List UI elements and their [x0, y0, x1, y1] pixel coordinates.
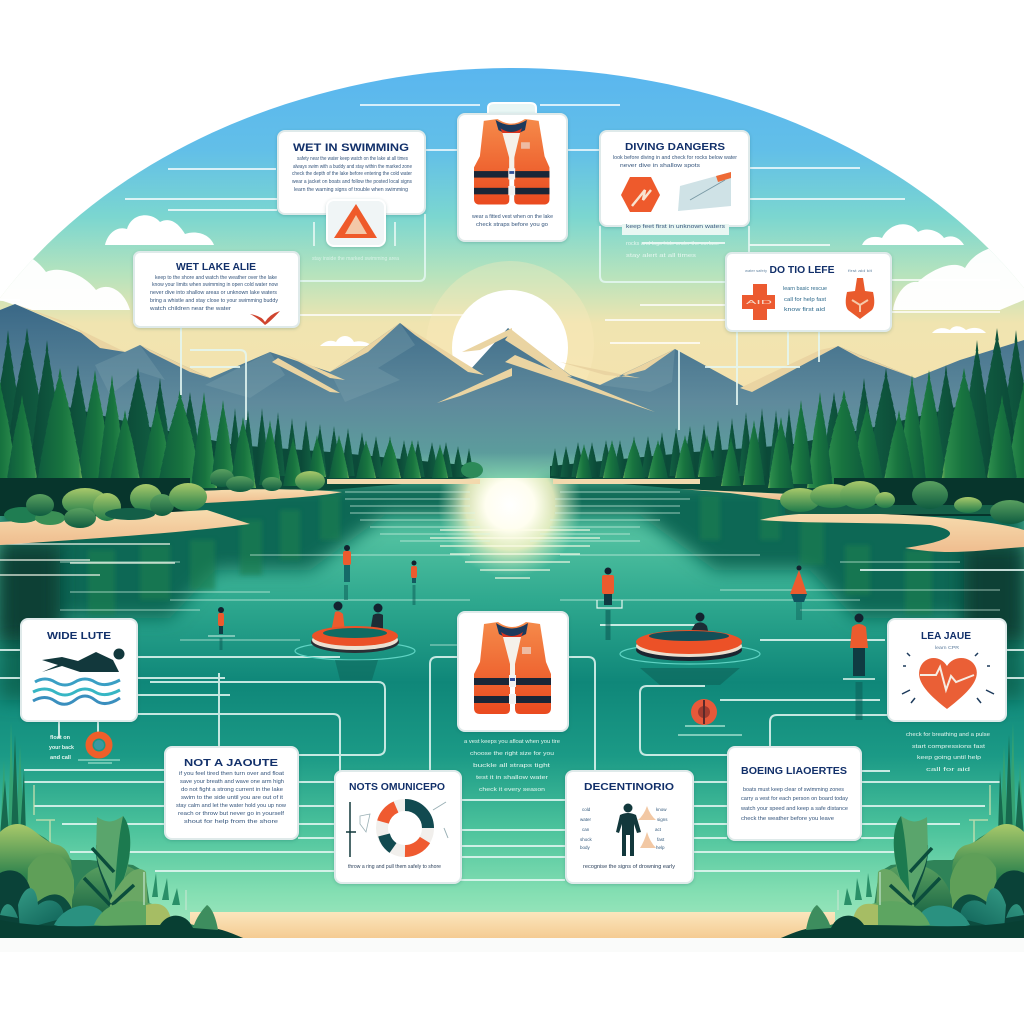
left forest	[0, 328, 474, 516]
side labels: water	[580, 817, 592, 822]
side labels: help	[656, 845, 665, 850]
caption	[472, 214, 553, 228]
body text: safety near the water keep watch on the lake at all times	[297, 156, 408, 162]
panel: do the left: first aid kit	[848, 268, 873, 273]
side labels	[580, 807, 668, 850]
heading: WIDE LUTE	[47, 631, 111, 642]
body text: always swim with a buddy and stay within the marked zone	[293, 164, 412, 170]
icon: life vest	[474, 622, 551, 714]
lake scene background	[0, 60, 1024, 490]
body text: check the depth of the lake before entering the cold water	[292, 171, 412, 177]
pale caption: stay alert at all times	[626, 253, 697, 259]
body text: watch your speed and keep a safe distance	[741, 806, 848, 812]
icon: cones	[638, 806, 656, 848]
right shore	[553, 479, 1024, 552]
panel: lea jaue	[888, 619, 1006, 721]
caption: heart: check for breathing and a pulse	[906, 732, 990, 738]
person 1	[343, 545, 351, 600]
heading: BOEING LIAOERTES	[741, 766, 847, 777]
side labels: cold	[582, 807, 591, 812]
heading: LEA JAUE	[921, 631, 971, 642]
body text	[741, 787, 849, 822]
bottom sand	[190, 912, 835, 940]
person 4	[790, 566, 807, 620]
body text	[150, 275, 279, 312]
caption: left ring: float on	[50, 735, 70, 741]
sun reflection	[440, 478, 580, 575]
body text: wear a jacket on boats and follow the posted local signs	[292, 179, 412, 185]
side labels: fast	[657, 837, 665, 842]
person 6	[843, 614, 875, 720]
water streaks	[60, 492, 1000, 645]
body text: bring a whistle and stay close to your swimming buddy	[150, 298, 279, 304]
body text: know first aid	[784, 307, 825, 313]
caption: vest: test it in shallow water	[476, 775, 548, 781]
pale caption: rocks and logs hide under the surface	[626, 241, 719, 247]
panel: diving dangers	[600, 131, 749, 282]
icon: medical cross: AID	[746, 300, 773, 306]
side labels: shock	[580, 837, 593, 842]
panel: wide lute	[21, 619, 137, 721]
right forest	[550, 328, 1024, 516]
icon: swimmer	[42, 648, 124, 672]
foreground plants left	[0, 722, 243, 938]
icon: bird	[250, 311, 280, 325]
sun	[432, 261, 588, 370]
lake and shores	[0, 328, 1024, 940]
icon: shield badge	[846, 278, 874, 319]
body text: learn basic rescue	[783, 286, 827, 292]
body text: look before diving in and check for rocks below water	[613, 155, 737, 161]
panel: do the left: water safety	[745, 268, 767, 273]
caption: vest: check it every season	[479, 787, 545, 793]
icon: whistle	[433, 802, 448, 838]
swimmer figures	[208, 545, 875, 720]
raft left	[295, 602, 415, 680]
side labels: signs	[657, 817, 668, 822]
floating buoy center	[678, 699, 742, 735]
icon: pin	[360, 814, 370, 832]
side labels: act	[655, 827, 662, 832]
body text: check the weather before you leave	[741, 816, 834, 822]
icon: sign card	[678, 172, 731, 211]
panel: wet in swimming	[278, 131, 425, 281]
mountains	[0, 304, 1024, 480]
body text: never dive in shallow spots	[620, 163, 701, 169]
caption: heart	[906, 732, 990, 773]
body text: if you feel tired then turn over and float	[179, 771, 285, 777]
caption: heart: start compressions fast	[912, 744, 986, 750]
water	[0, 478, 1024, 940]
body text	[176, 771, 286, 825]
icon: hexagon warning	[621, 177, 660, 212]
body text: do not fight a strong current in the lake	[181, 787, 283, 793]
icon: warning triangle	[327, 200, 385, 246]
caption: vest	[464, 739, 560, 793]
side labels: body	[580, 845, 591, 850]
connector lines	[0, 570, 1024, 880]
panel: decentinorio	[566, 771, 693, 883]
pale caption	[626, 241, 719, 259]
icon: life vest	[474, 119, 549, 205]
body text: call for help fast	[784, 297, 827, 303]
caption: vest: buckle all straps tight	[473, 763, 551, 769]
sky streaks	[0, 105, 1000, 343]
panel: nots omunicepo	[335, 771, 461, 883]
side labels: can	[582, 827, 590, 832]
panel: life vest top	[458, 103, 567, 241]
heading: DIVING DANGERS	[625, 142, 725, 153]
body text: carry a vest for each person on board today	[741, 796, 849, 802]
bottom edge shading	[0, 938, 1024, 952]
icon: medical cross	[742, 284, 775, 320]
panel: do the left	[679, 253, 891, 430]
floating ring left	[78, 735, 120, 763]
icon: waves	[33, 679, 120, 704]
body text: watch children near the water	[150, 306, 231, 312]
body text: boats must keep clear of swimming zones	[743, 787, 845, 793]
heading: WET LAKE ALIE	[176, 262, 256, 273]
body text	[783, 286, 827, 313]
caption: heart: call for aid	[926, 767, 970, 773]
caption: vest: choose the right size for you	[470, 751, 554, 757]
heading: WET IN SWIMMING	[293, 142, 409, 154]
caption: left ring: your back	[49, 745, 74, 751]
icon: heart	[902, 653, 994, 709]
caption: check straps before you go	[476, 222, 548, 228]
caption: wear a fitted vest when on the lake	[472, 214, 553, 220]
heading: NOTS OMUNICEPO	[349, 782, 445, 793]
body text: save your breath and wave one arm high	[180, 779, 284, 785]
caption: heart: keep going until help	[917, 755, 981, 761]
icon: life ring	[382, 805, 428, 851]
panel: not a jaoute	[165, 747, 298, 839]
panel: boeing liaoertes	[728, 747, 861, 840]
clouds	[0, 215, 1024, 346]
caption: stay inside the marked swimming area	[312, 256, 399, 262]
caption: vest: a vest keeps you afloat when you tire	[464, 739, 560, 745]
heading: NOT A JAOUTE	[184, 758, 278, 769]
person 2	[411, 560, 417, 605]
icon: person	[616, 804, 641, 856]
person 3	[597, 568, 622, 640]
body text: know your limits when swimming in open cold water now	[152, 282, 278, 288]
tree reflections	[0, 482, 1024, 700]
body text: stay calm and let the water hold you up now	[176, 803, 286, 809]
caption: left ring	[49, 735, 74, 761]
heading: DECENTINORIO	[584, 782, 674, 793]
left shore	[0, 462, 483, 545]
sky	[0, 68, 1024, 386]
body text: shout for help from the shore	[184, 819, 278, 825]
body text: reach or throw but never go in yourself	[178, 811, 285, 817]
body text	[613, 155, 737, 169]
body text: swim to the side until you are out of it	[181, 795, 284, 801]
foreground plants right	[781, 722, 1024, 938]
raft right	[620, 612, 760, 685]
icon: vertical marker	[346, 802, 356, 857]
person 5	[208, 607, 235, 650]
body text: never dive into shallow areas or unknown lake waters	[150, 290, 278, 296]
body text	[292, 156, 412, 193]
subheading: learn CPR	[935, 645, 960, 650]
heading: DO TIO LEFE	[770, 265, 835, 276]
caption band	[622, 224, 729, 235]
side labels: know	[656, 807, 667, 812]
caption: left ring: and call	[50, 755, 72, 761]
body text: learn the warning signs of trouble when swimming	[294, 187, 408, 193]
panel: wet lake alie	[134, 252, 299, 420]
body text: keep to the shore and watch the weather over the lake	[155, 275, 277, 281]
caption: throw a ring and pull them safely to shore	[348, 864, 441, 870]
panel: life vest bottom	[458, 612, 568, 731]
caption text: keep feet first in unknown waters	[626, 224, 726, 230]
caption: recognise the signs of drowning early	[583, 864, 676, 870]
